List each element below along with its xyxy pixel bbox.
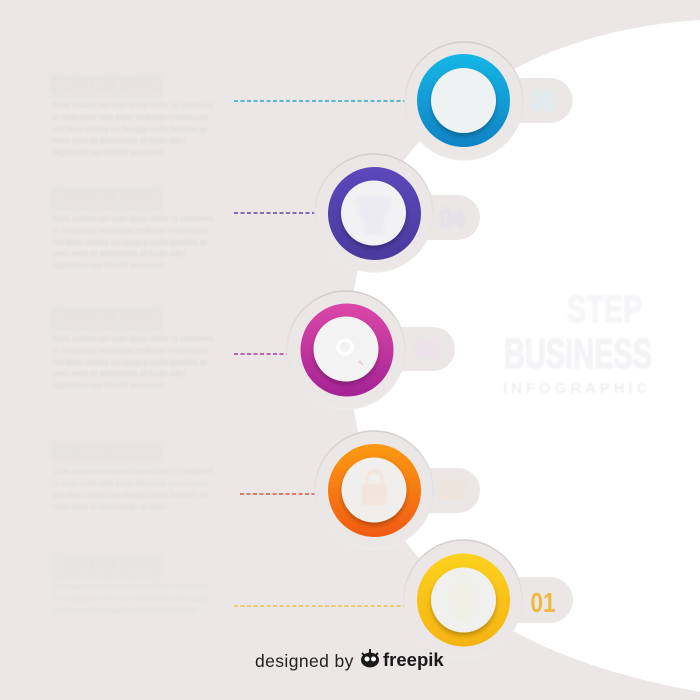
icon <box>338 340 363 365</box>
ring <box>328 444 421 537</box>
step 5 text (top) <box>0 0 230 165</box>
disc <box>287 291 405 409</box>
number 03: 03 <box>414 334 440 364</box>
tab <box>500 577 573 623</box>
footer credit <box>255 649 444 671</box>
disc <box>405 42 523 160</box>
title block <box>503 289 652 397</box>
ring <box>328 167 421 260</box>
number 05: 05 <box>531 86 555 116</box>
icon: bulb <box>449 583 477 619</box>
number 04: 04 <box>439 203 465 233</box>
designed by: designed by <box>255 651 354 671</box>
tab <box>410 468 480 513</box>
body text: Duis autem vel eum iriure dolor in hendrerit, in vulputate velit esse molestie consequat, vel illum dolore eu feugiat nulla facilisis at vero eros et accumsan et iusto <box>53 466 215 511</box>
body text: Duis autem vel eum iriure dolor in hendrerit, in vulputate velit esse molestie consequat, vel illum dolore eu feugiat nulla facilisis at vero eros et accumsan et iusto odio dignissim qui blandit praesent <box>53 333 215 390</box>
number 01: 01 <box>530 587 556 618</box>
step 4 text <box>0 180 230 278</box>
title word STEP: STEP <box>567 289 642 331</box>
number 02: 02 <box>439 475 465 505</box>
step 1 text <box>0 548 230 628</box>
disc <box>315 154 433 272</box>
tab <box>410 195 480 240</box>
body text: Duis autem vel eum iriure dolor in hendrerit, in vulputate velit esse molestie consequat, vel illum dolore eu feugiat nulla facilisis at vero eros et accumsan et iusto odio dignissim qui blandit praesent <box>53 100 215 157</box>
body text: Duis autem vel eum iriure dolor in hendrerit, in vulputate velit esse molestie consequat, vel illum dolore eu feugiat nulla facilisis at vero eros et accumsan et iusto odio dignissim qui blandit praesent <box>53 213 215 270</box>
cap <box>431 68 496 133</box>
cap <box>342 458 406 522</box>
step 2 text <box>0 433 230 518</box>
step 3 text <box>0 300 230 398</box>
ring <box>300 304 394 396</box>
cap <box>431 568 496 632</box>
freepik: freepik <box>383 649 444 670</box>
disc <box>315 431 433 549</box>
icon: lock <box>362 472 387 505</box>
title word BUSINESS: BUSINESS <box>504 330 652 377</box>
icon <box>354 197 392 234</box>
title word INFOGRAPHIC: INFOGRAPHIC <box>503 380 651 397</box>
tab <box>380 327 455 371</box>
disc <box>404 540 522 658</box>
ring <box>417 54 510 147</box>
cap <box>314 316 378 382</box>
tab <box>500 78 572 123</box>
logo mark <box>361 649 379 668</box>
body text: Duis autem vel eum iriure dolor in hendrerit, in vulputate velit esse molestie consequat, vel illum dolore eu feugiat nulla facilisis <box>53 581 215 615</box>
ring <box>417 554 510 646</box>
cap <box>341 180 406 246</box>
